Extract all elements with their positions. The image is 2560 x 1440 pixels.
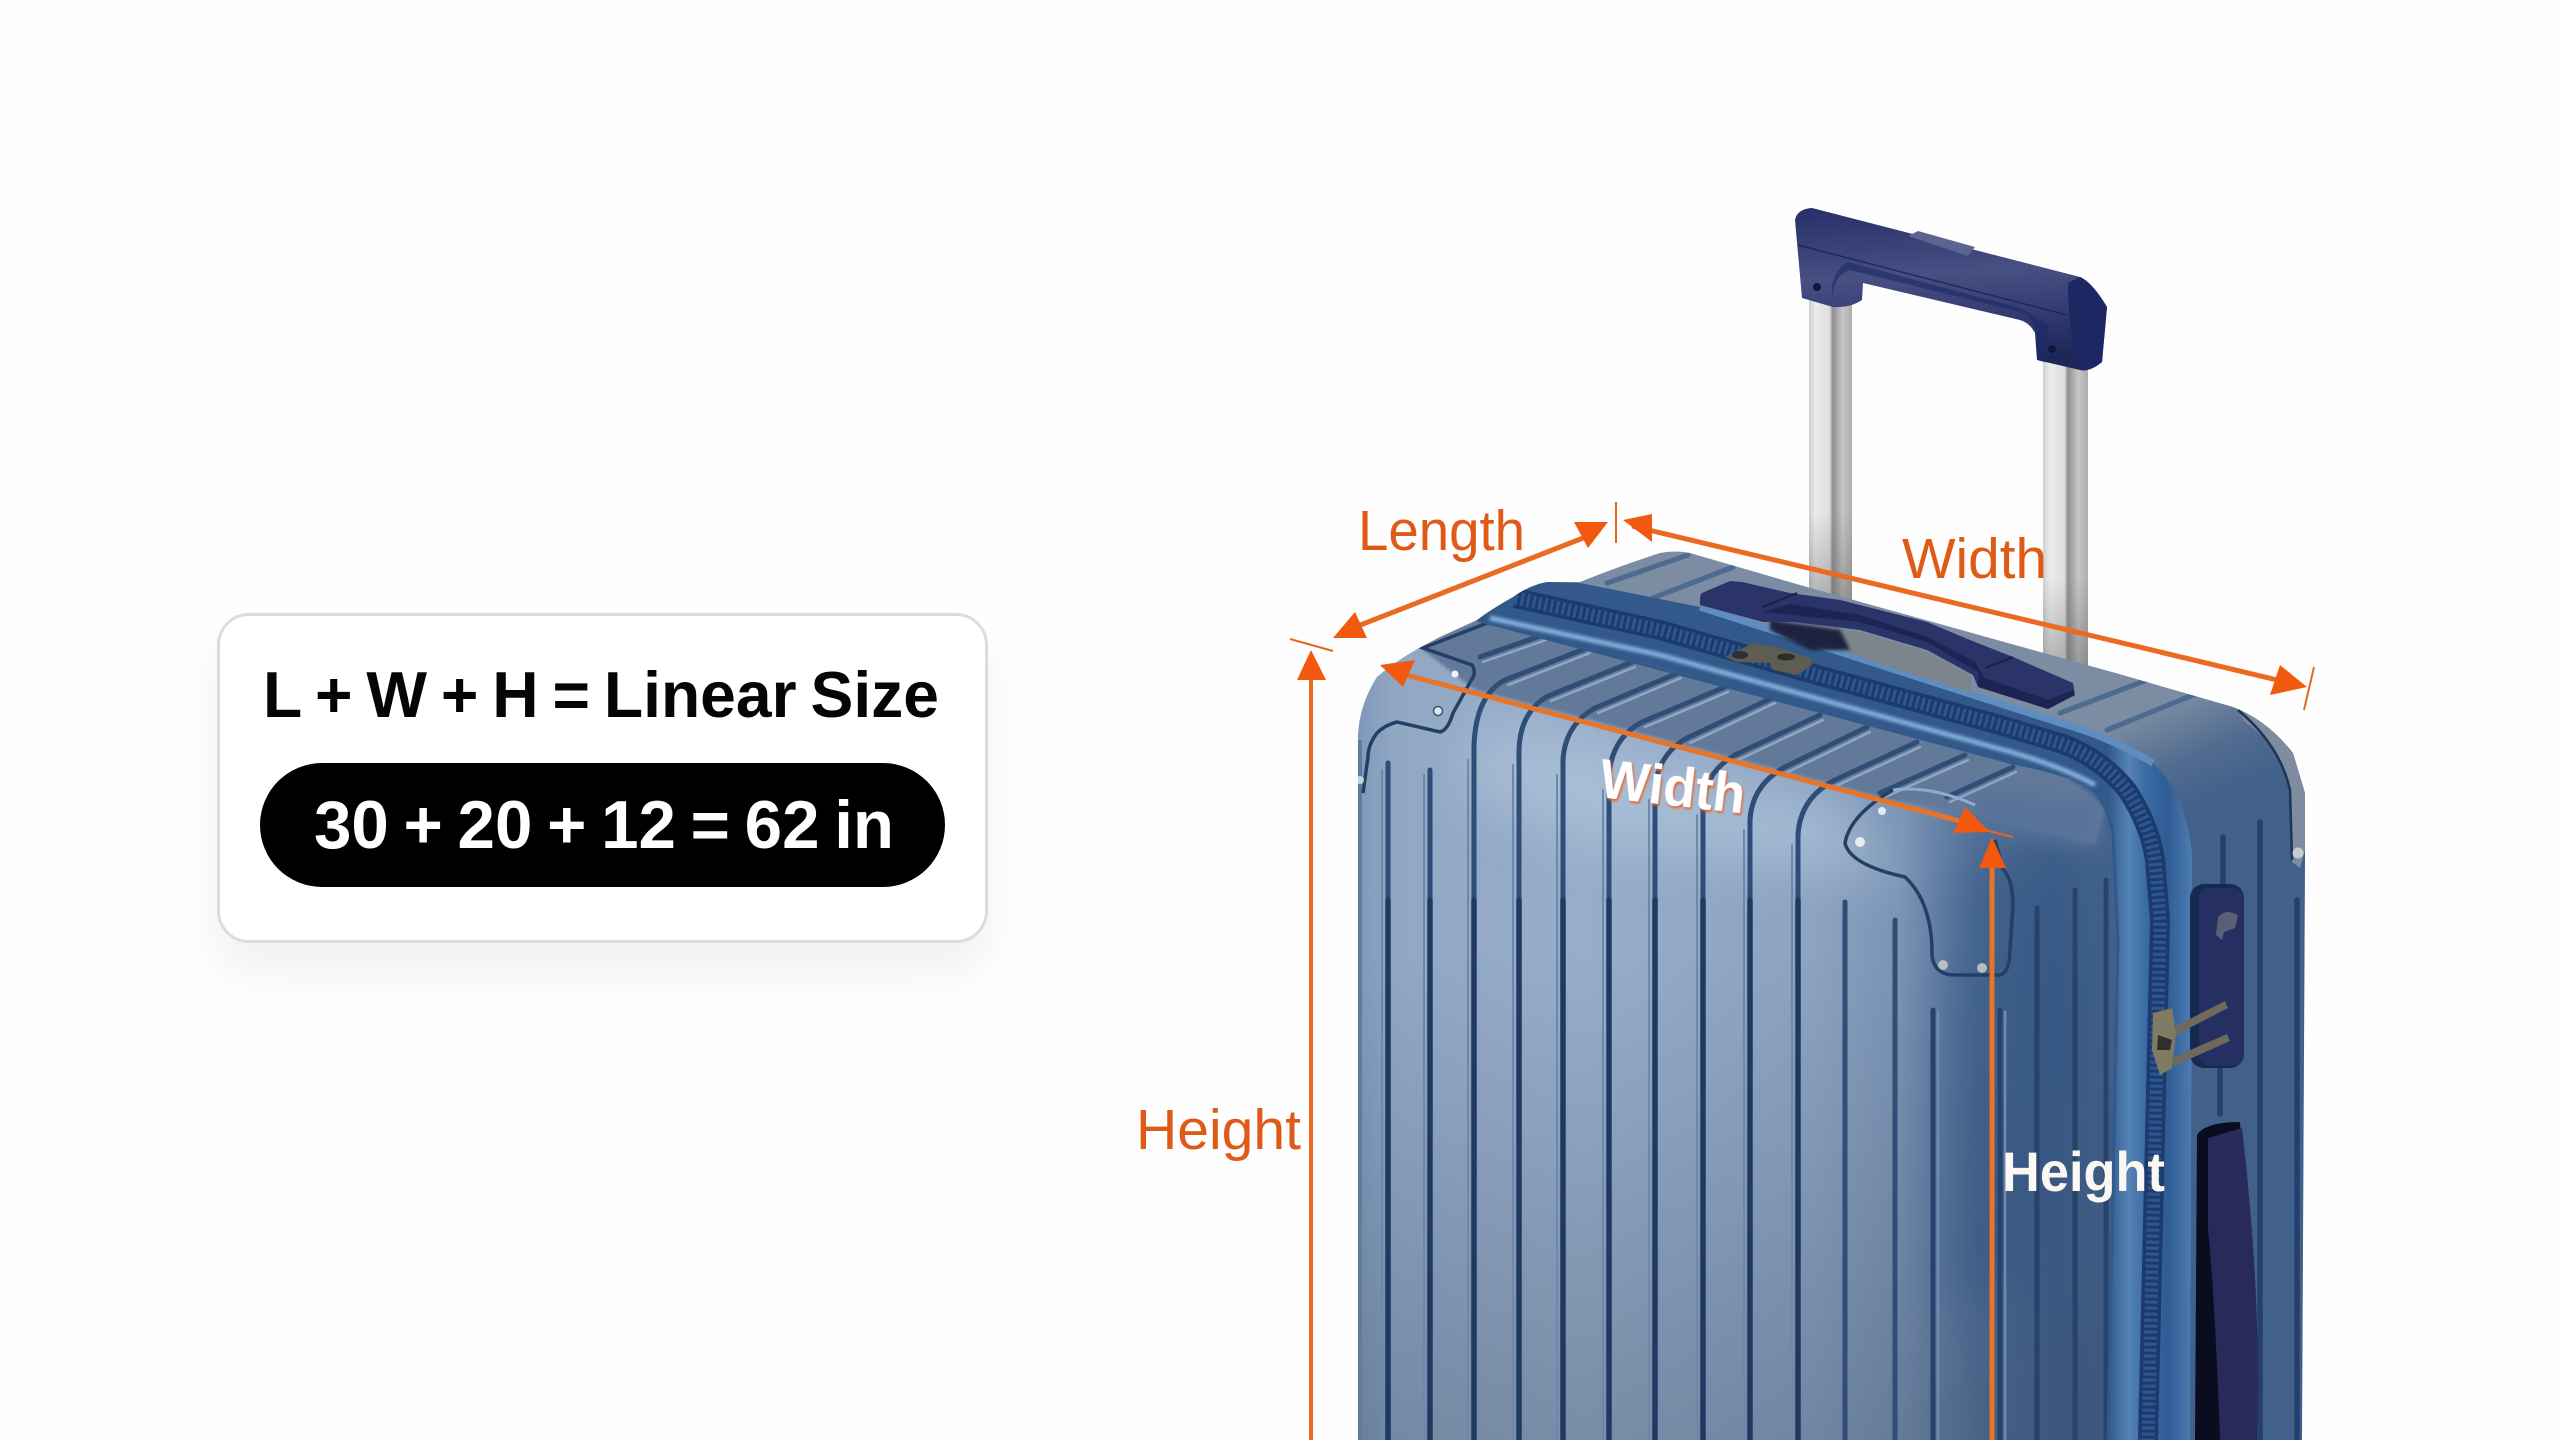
label: height left: Height xyxy=(1136,1098,1301,1162)
arrow: height on front xyxy=(1979,837,2006,1440)
icon: zipper pull xyxy=(1725,643,1812,675)
zipper track xyxy=(1515,598,2160,1440)
right corner guard xyxy=(1845,789,2013,975)
ribs flowing into vertical grooves xyxy=(1382,635,2106,1440)
panel: linear size formula card xyxy=(217,613,988,943)
formula example pill xyxy=(260,763,945,887)
luggage diagram and formula text xyxy=(260,208,2315,1440)
suitcase body xyxy=(1340,552,2305,1440)
label: width top: Width xyxy=(1902,527,2047,591)
lip highlight xyxy=(1490,618,2095,785)
label: height front: Height xyxy=(2002,1140,2165,1203)
label: width front: Width xyxy=(1597,746,1749,825)
side panel xyxy=(2060,672,2305,1440)
label: length: Length xyxy=(1358,499,1525,563)
arrow: height outside xyxy=(1297,650,1326,1440)
formula heading: L + W + H = Linear Size xyxy=(263,658,939,731)
top front chamfer xyxy=(1423,612,2105,850)
arrow: width on front xyxy=(1380,660,2013,837)
formula example pill: 30 + 20 + 12 = 62 in xyxy=(314,787,894,863)
icon: telescopic handle xyxy=(1795,208,2107,670)
left strip xyxy=(1358,740,1362,1440)
shadow at the front corner xyxy=(1945,860,2090,1300)
highlight on front face xyxy=(1470,720,1900,880)
seam band and zipper xyxy=(1477,582,2192,1440)
metal corner strip xyxy=(2237,707,2305,868)
front face xyxy=(1340,630,2120,1440)
icon: combination lock xyxy=(2152,884,2244,1075)
arrow: width along back xyxy=(1623,514,2314,710)
icon: side handle xyxy=(2195,1122,2258,1440)
arrow: length xyxy=(1290,502,1616,651)
back top ribs xyxy=(1607,555,1733,598)
icon: top carry handle xyxy=(1700,581,2075,709)
left corner guard xyxy=(1358,623,1488,794)
